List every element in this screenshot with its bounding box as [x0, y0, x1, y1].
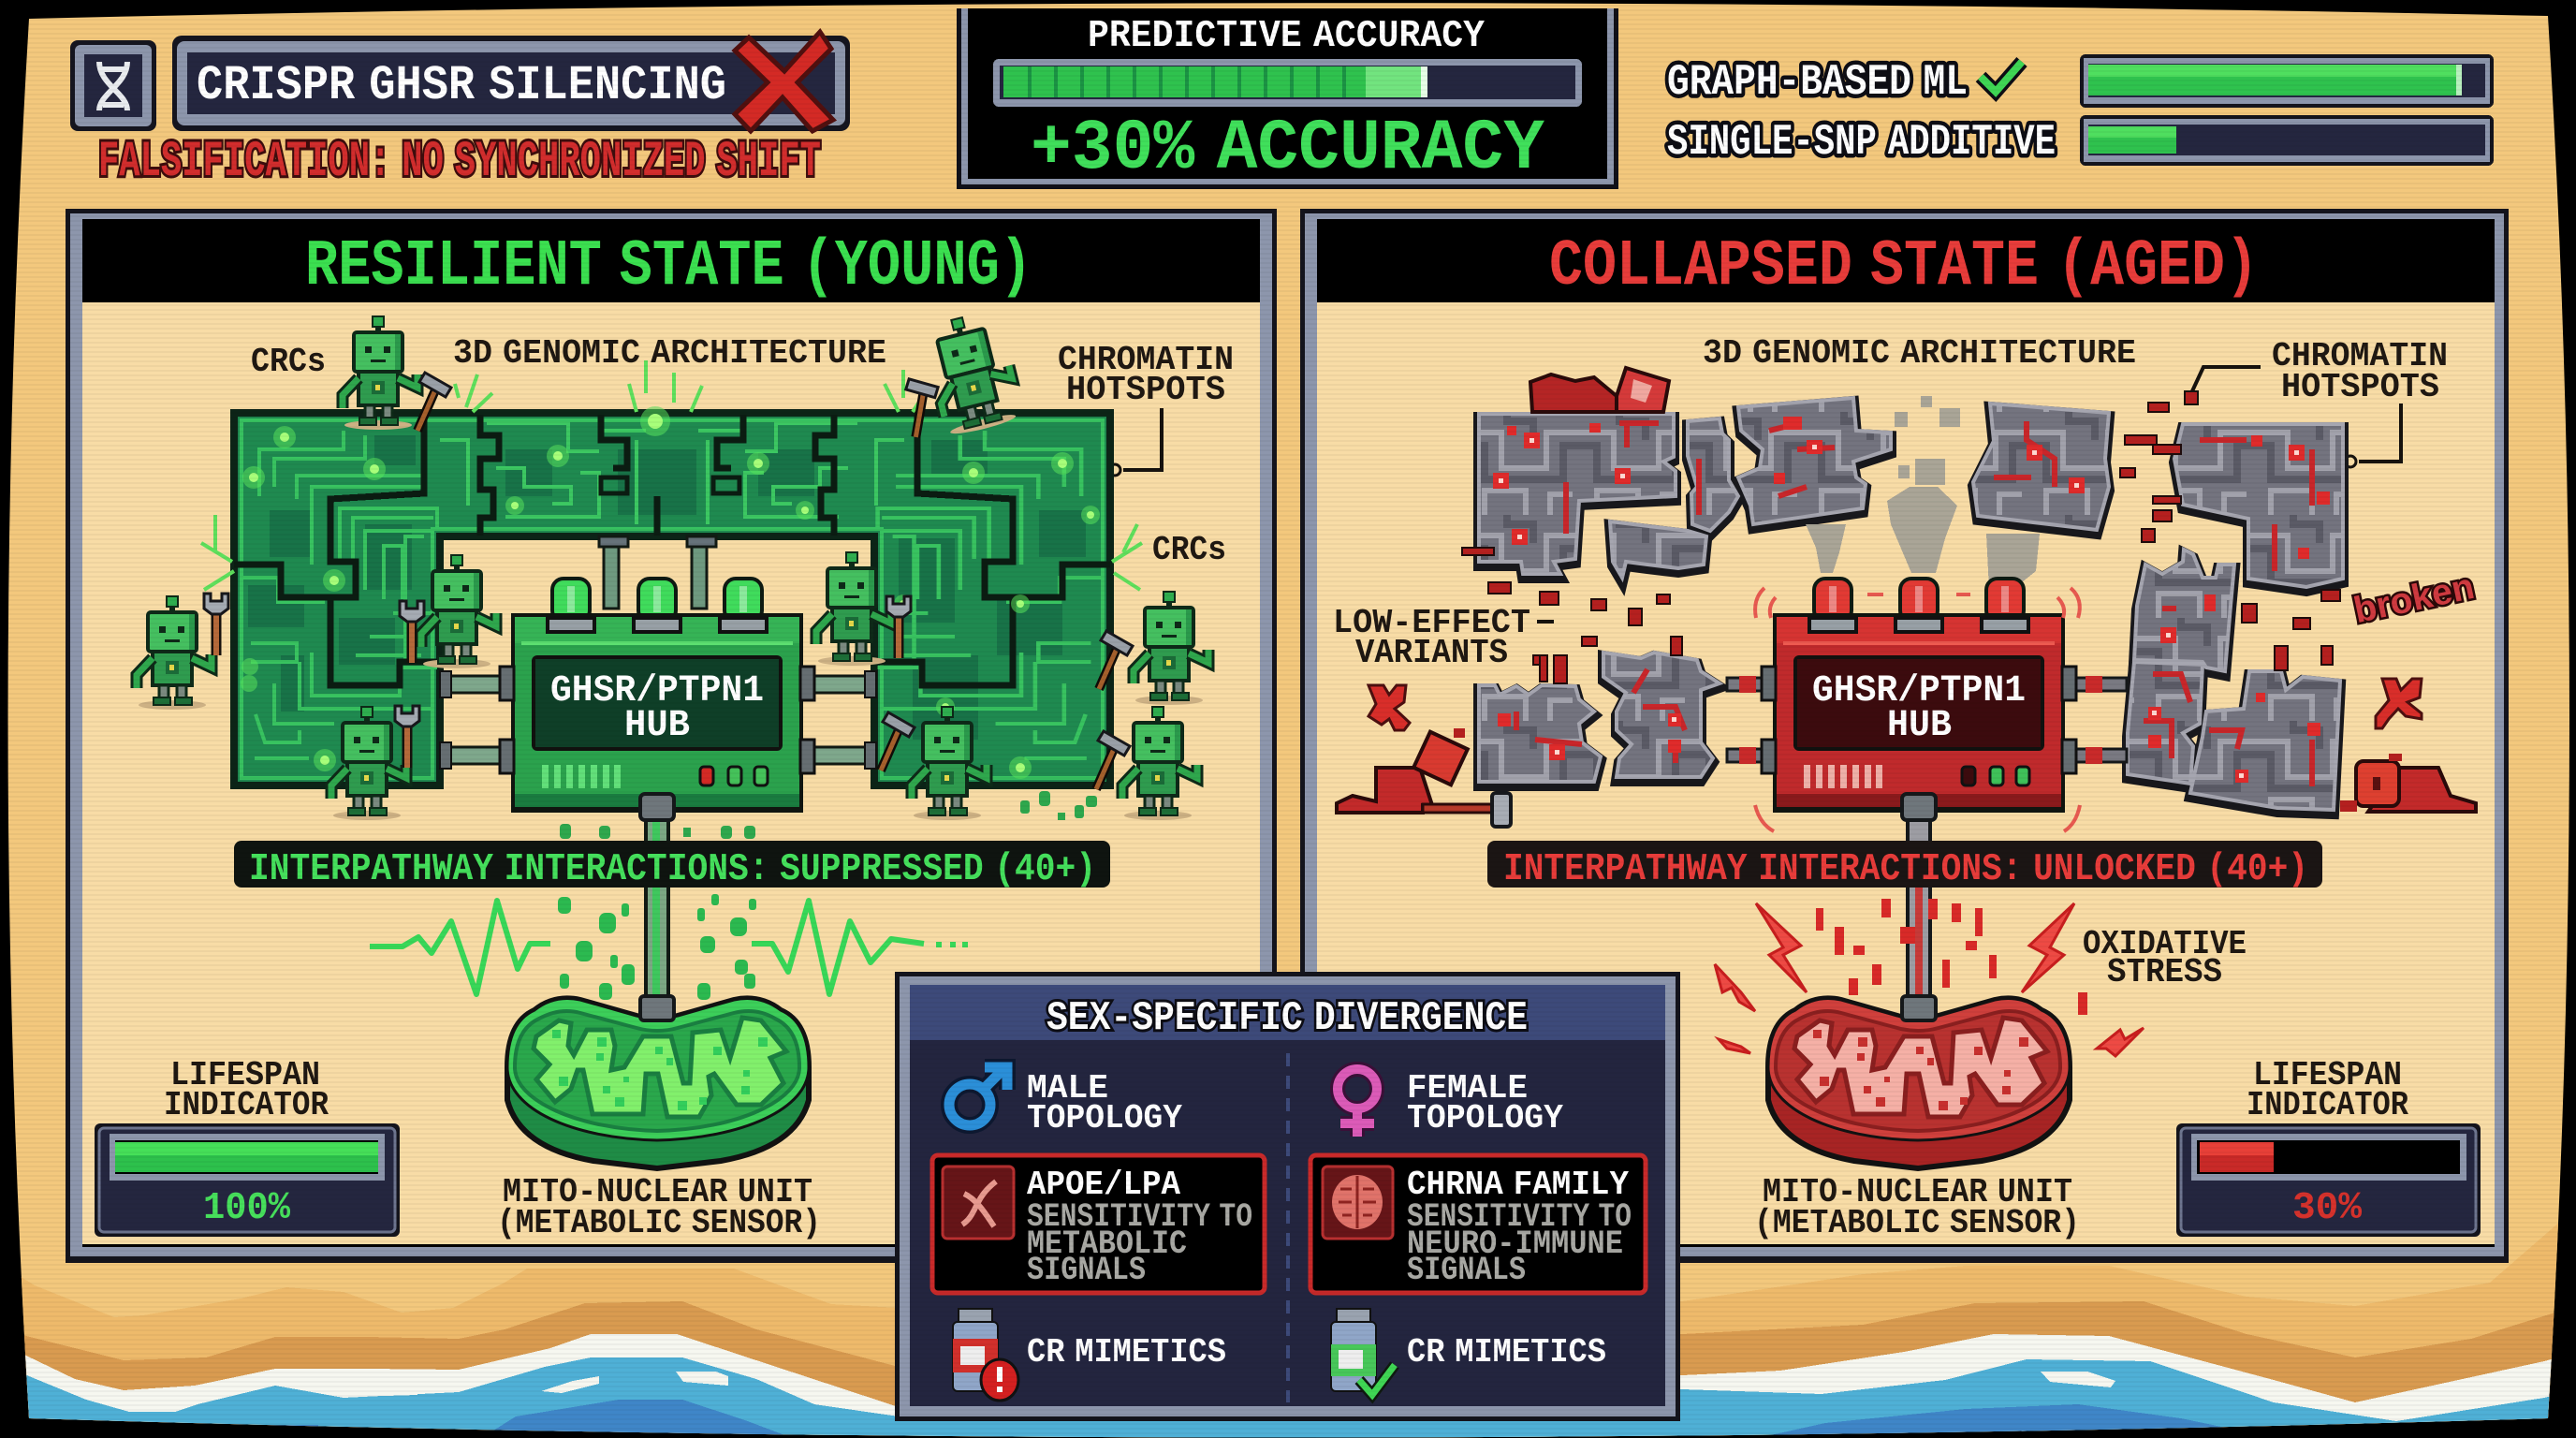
- label: CRCs right: CRCs: [1152, 531, 1226, 569]
- panel: collapsed state: [1300, 209, 2509, 1263]
- box: APOE/LPA: APOE/LPA: [1027, 1166, 1180, 1204]
- connectors to top board: [440, 536, 876, 769]
- darker board patches: [248, 435, 1086, 740]
- accuracy progress bar: [993, 59, 1582, 107]
- box: CHRNA family: [1310, 1155, 1646, 1293]
- label: mito-nuclear unit: (METABOLIC SENSOR): [1754, 1204, 2080, 1242]
- label: 3D genomic architecture: 3D GENOMIC ARCHITECTURE: [1703, 334, 2136, 373]
- label: oxidative stress: STRESS: [2107, 953, 2222, 991]
- robot top left: [343, 316, 451, 431]
- hub label: HUB: [1887, 705, 1952, 747]
- icon: vial warning: [953, 1309, 1018, 1401]
- falling green specks: [560, 791, 1097, 839]
- header: dna icon badge: [70, 40, 156, 131]
- robot bottom left: [331, 706, 419, 820]
- column: female topology: CR MIMETICS: [1407, 1333, 1606, 1372]
- label: mito-nuclear unit: MITO-NUCLEAR UNIT: [503, 1173, 812, 1211]
- icon: red cross left: [1368, 685, 1410, 730]
- box: APOE/LPA: METABOLIC: [1027, 1225, 1187, 1263]
- column: female topology: TOPOLOGY: [1407, 1099, 1563, 1137]
- box: CHRNA family: CHRNA FAMILY: [1407, 1166, 1629, 1204]
- sparks on circuit: [201, 360, 1142, 590]
- graph-based ML bar: [2080, 54, 2494, 108]
- wrecked red fragments on chunk: [1530, 368, 1669, 412]
- lifespan indicator: 30%: INDICATOR: [2247, 1086, 2408, 1124]
- column: male topology: [932, 1067, 1265, 1401]
- icon: check mark: [1981, 62, 2022, 92]
- metabolite particles: [558, 894, 756, 1000]
- label: chromatin hotspots: [2185, 337, 2448, 467]
- black seams: [234, 415, 1110, 685]
- signal waves: [370, 901, 924, 994]
- lifespan indicator: 30%: LIFESPAN: [2253, 1056, 2402, 1094]
- icon: red cross: [735, 32, 833, 131]
- accuracy figure: +30% ACCURACY: [1031, 109, 1544, 189]
- beach sand and waves: [0, 1208, 2576, 1438]
- label: mito-nuclear unit: [1754, 1173, 2080, 1242]
- lifespan indicator: 100%: [95, 1056, 400, 1237]
- lifespan indicator: 100%: LIFESPAN: [170, 1056, 320, 1094]
- hub label: HUB: [624, 705, 690, 747]
- left panel title: RESILIENT STATE (YOUNG): [305, 230, 1032, 304]
- box: APOE/LPA: SENSITIVITY TO: [1027, 1198, 1252, 1236]
- hub label: GHSR/PTPN1: [550, 670, 764, 712]
- mitochondrion: collapsed: [1768, 996, 2070, 1168]
- box: APOE/LPA: SIGNALS: [1027, 1252, 1146, 1289]
- box: CHRNA family: NEURO-IMMUNE: [1407, 1225, 1623, 1263]
- light traces, left leg: [241, 431, 437, 758]
- hub label: GHSR/PTPN1: [1812, 670, 2026, 712]
- lifespan indicator: 100%: INDICATOR: [164, 1086, 329, 1124]
- comparison: single-SNP additive: SINGLE-SNP ADDITIVE: [1667, 118, 2056, 167]
- hub label: [1812, 670, 2026, 747]
- label: chromatin hotspots: HOTSPOTS: [1066, 371, 1225, 409]
- column: male topology: MALE: [1027, 1069, 1108, 1108]
- stem from hub to mitochondrion: [1906, 805, 1932, 1006]
- box: APOE/LPA: [932, 1155, 1265, 1293]
- lifespan indicator: 100%: 100%: [203, 1187, 290, 1230]
- label: 3D genomic architecture: 3D GENOMIC ARCHITECTURE: [453, 334, 886, 373]
- robot bottom inner right: [881, 707, 987, 820]
- label: low-effect variants: LOW-EFFECT: [1333, 604, 1530, 642]
- lifespan indicator: 30%: 30%: [2292, 1187, 2362, 1230]
- label: mito-nuclear unit: [497, 1173, 821, 1242]
- fallen robot left: [1337, 728, 1511, 827]
- single-SNP bar: [2080, 115, 2494, 166]
- label: mito-nuclear unit: (METABOLIC SENSOR): [497, 1204, 821, 1242]
- interpathway banner: INTERPATHWAY INTERACTIONS: UNLOCKED (40+): [1503, 848, 2308, 891]
- panel: sex-specific divergence: [895, 972, 1680, 1421]
- icon: red cross right: [2376, 679, 2422, 728]
- red hotspots: [1493, 417, 2330, 783]
- header: CRISPR GHSR silencing bar: [172, 36, 850, 131]
- label: oxidative stress: OXIDATIVE: [2083, 925, 2247, 963]
- robot inside left: [400, 555, 496, 668]
- light traces, right leg: [878, 431, 1103, 758]
- label: chromatin hotspots: [1058, 341, 1234, 476]
- panel heading: SEX-SPECIFIC DIVERGENCE: [1046, 995, 1528, 1042]
- connectors to hub: [1727, 676, 2127, 764]
- circuit board: 3D genome arch: [234, 406, 1110, 785]
- debris: [1462, 403, 2340, 683]
- hub label: [552, 673, 762, 736]
- fallen robot right: [2340, 754, 2476, 812]
- light traces, top band: [440, 423, 904, 524]
- panel: resilient state: [66, 209, 1277, 1263]
- mitochondrion: resilient: [507, 996, 809, 1168]
- robot inside right: [816, 552, 911, 666]
- column: male topology: CR MIMETICS: [1027, 1333, 1226, 1372]
- column: female topology: [1310, 1069, 1646, 1395]
- icon: male symbol: [949, 1067, 1007, 1125]
- shattered genome chunks: [1479, 398, 2343, 814]
- box: CHRNA family: SIGNALS: [1407, 1252, 1526, 1289]
- icon: female symbol: [1338, 1069, 1377, 1137]
- label: chromatin hotspots: CHROMATIN: [1058, 341, 1234, 379]
- label: low-effect variants: VARIANTS: [1355, 634, 1508, 672]
- falsification note: FALSIFICATION: NO SYNCHRONIZED SHIFT: [98, 134, 821, 191]
- comparison: graph-based ML: GRAPH-BASED ML: [1667, 58, 1968, 107]
- label: low-effect variants: [1333, 604, 1554, 672]
- robot bottom right: [1096, 707, 1197, 820]
- smoke: [1806, 396, 2040, 590]
- glowing chromatin nodes: [241, 406, 1100, 779]
- accuracy heading: PREDICTIVE ACCURACY: [1088, 15, 1485, 58]
- panel: predictive accuracy: [957, 8, 1618, 189]
- lifespan indicator: 30%: [2176, 1056, 2481, 1237]
- robot left: [137, 594, 228, 710]
- label: chromatin hotspots: CHROMATIN: [2272, 337, 2448, 375]
- robots: CRCs repairing the circuit: [137, 309, 1208, 820]
- oxidative stress lightning and sparks: [1715, 903, 2144, 1056]
- label: chromatin hotspots: HOTSPOTS: [2281, 368, 2439, 406]
- alarm vibration marks: [1755, 588, 2080, 831]
- label: broken: broken: [2350, 566, 2478, 631]
- label: oxidative stress: [2083, 925, 2247, 991]
- column: female topology: FEMALE: [1407, 1069, 1528, 1108]
- box: CHRNA family: SENSITIVITY TO: [1407, 1198, 1632, 1236]
- bar label: CRISPR GHSR SILENCING: [197, 58, 726, 113]
- GHSR/PTPN1 hub failed: [1762, 579, 2076, 820]
- right panel title: COLLAPSED STATE (AGED): [1549, 230, 2259, 304]
- robot right: [1099, 592, 1208, 705]
- column: male topology: TOPOLOGY: [1027, 1099, 1182, 1137]
- label: mito-nuclear unit: MITO-NUCLEAR UNIT: [1763, 1173, 2072, 1211]
- stem from hub to mitochondrion: [644, 822, 670, 994]
- robot top right: [904, 316, 1020, 438]
- interpathway banner: INTERPATHWAY INTERACTIONS: SUPPRESSED (40+): [249, 848, 1096, 891]
- red damage traces: [1516, 421, 2312, 786]
- label: CRCs: CRCs: [251, 343, 326, 381]
- icon: vial ok: [1331, 1309, 1395, 1395]
- GHSR/PTPN1 hub: [500, 579, 814, 820]
